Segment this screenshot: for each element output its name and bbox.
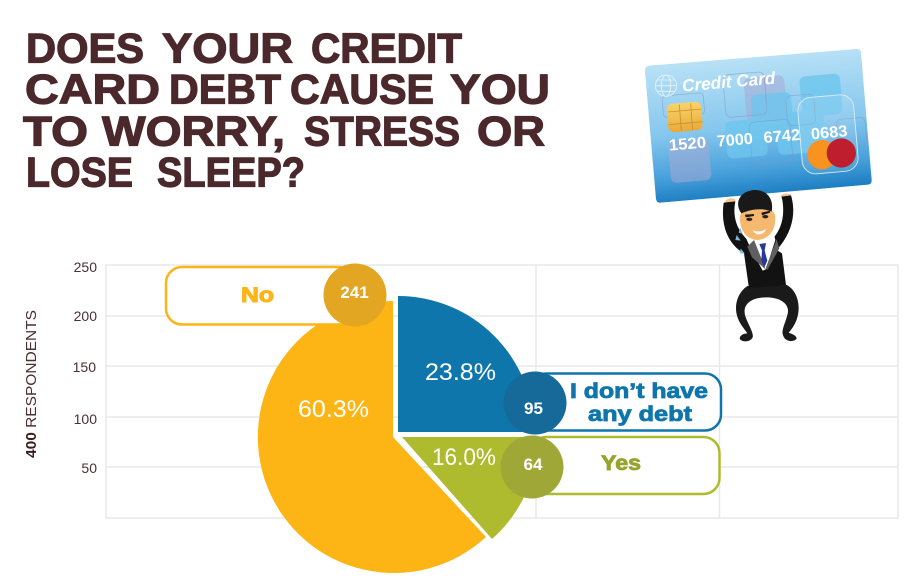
pie chart [258,296,538,573]
title: YOU [450,66,550,112]
man: head [740,208,775,240]
man: hands [725,193,791,203]
title: CREDIT [311,24,462,72]
percentage labels [298,359,496,471]
y axis labels: 250 [74,259,97,275]
title: WORRY, [102,108,285,154]
title: STRESS [304,108,460,154]
y axis labels: 100 [74,411,97,427]
title: TO [23,108,88,154]
chart grid [106,265,898,518]
credit card [645,49,872,203]
y axis labels: 50 [81,460,97,476]
callout: Yes [530,437,720,494]
title: OR [477,108,545,154]
title [23,24,550,196]
callout: No [166,267,356,324]
y axis labels: 150 [73,359,96,375]
pie slice: I don't have any debt 23.8% [398,296,534,432]
title: CARD [25,66,160,112]
percentage labels: 16.0% [432,444,496,471]
pie slice: No 60.3% [258,301,486,573]
title: DOES [26,24,144,72]
y axis labels: 200 [74,308,97,324]
man: hair [738,190,772,213]
count badge: 241 [324,264,386,326]
count badge: 95: 95 [524,399,543,418]
man: eyes and smile [745,211,770,217]
title: LOSE [26,148,133,196]
card: globe icon [655,75,677,96]
man: shirt collar [745,235,775,271]
card: chip [666,101,703,133]
man: torso and arms [723,195,793,288]
count badge: 64: 64 [524,455,543,474]
title: CAUSE [290,66,434,112]
callout: I don't have any debt: any debt [588,403,692,426]
illustration: man holding credit card [723,190,799,341]
count badge: 64 [500,436,564,498]
percentage labels: 60.3% [298,396,369,423]
callout: I don't have any debt: I don’t have [570,380,708,403]
percentage labels: 23.8% [425,359,496,386]
man: legs [736,285,799,341]
card: payment logo [807,140,837,169]
y axis title: 400 RESPONDENTS [23,310,40,458]
callout: Yes: Yes [601,452,641,475]
card: number: 0683 [810,123,848,143]
callout: I don't have any debt [530,374,721,430]
callout: No: No [241,284,274,307]
card: number [668,123,848,155]
card: number: 1520 [668,134,707,155]
title: DEBT [169,66,281,112]
card: decorative rounded squares [668,75,788,183]
count badge: 241: 241 [340,283,369,302]
title: YOUR [162,24,293,72]
pie slice: Yes 16.0% [402,437,538,539]
y axis labels [73,259,97,476]
count badge: 95 [504,372,566,434]
card: number: 6742 [763,127,801,147]
card: number: 7000 [716,131,754,151]
man: tie [759,243,767,267]
man: sweat drops [735,227,745,253]
card: brand text: Credit Card [681,68,776,96]
man: lapels [747,239,779,270]
title: SLEEP? [157,148,305,196]
